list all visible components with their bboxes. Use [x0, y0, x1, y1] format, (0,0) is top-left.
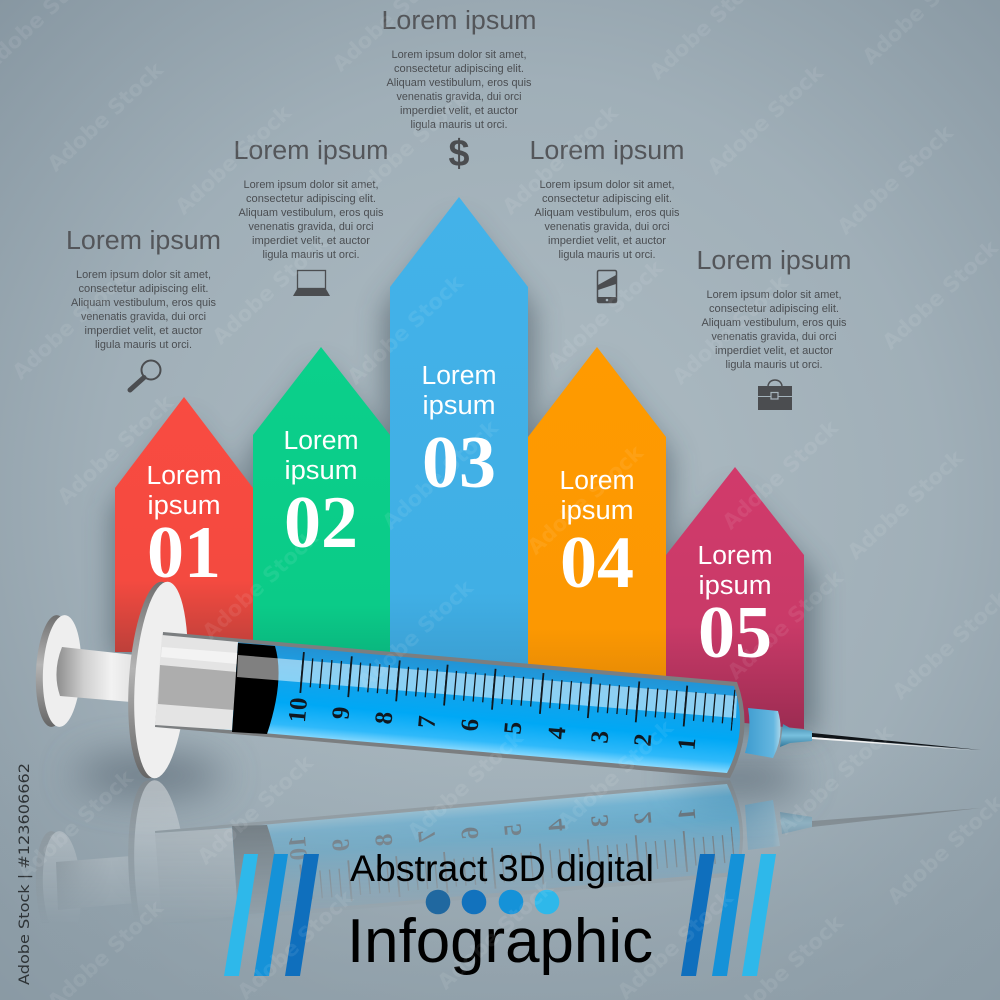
scale numbers: 4 — [544, 725, 572, 740]
scale numbers: 6 — [457, 718, 484, 732]
watermarks: Adobe Stock — [343, 270, 468, 389]
stripes right — [681, 854, 776, 976]
scale numbers: 5 — [500, 721, 527, 735]
scale numbers: 3 — [587, 730, 614, 744]
text block 05: Lorem ipsum — [696, 247, 852, 275]
panel: arrow 04: Lorem — [560, 467, 634, 495]
panel: arrow 03: 03 — [422, 422, 496, 504]
syringe reflection: 7 — [414, 829, 441, 843]
watermarks: Adobe Stock — [348, 85, 473, 204]
panel: arrow 02: Lorem — [284, 427, 358, 455]
syringe reflection: 5 — [500, 823, 527, 837]
syringe reflection: 8 — [371, 833, 398, 847]
scale numbers: 2 — [630, 733, 657, 747]
text block 05: Aliquam vestibulum, eros quis — [702, 317, 847, 329]
syringe reflection: 6 — [457, 826, 484, 840]
watermarks: Adobe Stock — [53, 390, 178, 509]
watermarks: Adobe Stock — [718, 415, 843, 534]
scale numbers: 10 — [284, 696, 313, 724]
panel: arrow 02 — [253, 347, 390, 670]
watermarks: Adobe Stock — [553, 715, 678, 834]
nozzle — [745, 708, 812, 758]
scale numbers: 8 — [371, 711, 398, 725]
floor plane — [0, 740, 1000, 1000]
text block 01: Lorem ipsum — [66, 227, 221, 255]
barrel flange — [122, 580, 194, 780]
watermarks: Adobe Stock — [703, 60, 828, 179]
scale numbers: 9 — [328, 706, 355, 720]
watermarks: Adobe Stock — [433, 875, 558, 994]
watermarks: Adobe Stock — [843, 445, 968, 564]
text block 03: Lorem ipsum — [382, 7, 536, 35]
panel: arrow 05: 05 — [698, 592, 772, 674]
icon: magnifier — [130, 360, 160, 390]
text block 02: Aliquam vestibulum, eros quis — [238, 207, 384, 219]
plunger seal — [232, 643, 279, 734]
text block 02: imperdiet velit, et auctor — [252, 235, 370, 247]
syringe — [33, 580, 981, 780]
plunger body — [155, 635, 238, 730]
panel: arrow 01: 01 — [147, 512, 221, 594]
text block 04: consectetur adipiscing elit. — [542, 193, 672, 205]
title line 2: Infographic — [347, 907, 653, 976]
watermarks: Adobe Stock — [668, 270, 793, 389]
panel: arrow 01: ipsum — [148, 492, 220, 520]
text block 02: consectetur adipiscing elit. — [246, 193, 376, 205]
stock side label: Adobe Stock | #123606662 — [17, 763, 33, 985]
panel: arrow 04 — [528, 347, 666, 690]
watermarks: Adobe Stock — [543, 255, 668, 374]
panel: arrow 01: Lorem — [146, 462, 222, 490]
text block 02: Lorem ipsum — [234, 137, 388, 165]
syringe reflection: 1 — [674, 807, 701, 821]
syringe reflection: 2 — [630, 811, 657, 825]
plunger end flange — [33, 614, 84, 728]
text block 05 — [696, 247, 852, 371]
glass highlight — [237, 655, 737, 718]
text block 04: imperdiet velit, et auctor — [548, 235, 666, 247]
text block 04 — [530, 137, 684, 261]
text block 02: venenatis gravida, dui orci — [248, 221, 374, 233]
text block 04: ligula mauris ut orci. — [558, 249, 656, 261]
floor shadows under syringe — [75, 755, 802, 798]
text block 05: Lorem ipsum dolor sit amet, — [706, 289, 842, 301]
panel: arrow 04: ipsum — [560, 497, 634, 525]
liquid — [159, 636, 740, 773]
text block 04: Lorem ipsum — [530, 137, 684, 165]
text block 02: ligula mauris ut orci. — [262, 249, 360, 261]
watermarks: Adobe Stock — [193, 750, 318, 869]
stripes left — [224, 854, 319, 976]
text block 04: Lorem ipsum dolor sit amet, — [540, 179, 674, 191]
watermarks: Adobe Stock — [878, 235, 1000, 354]
panel: arrow 05 — [666, 467, 804, 729]
text block 05: imperdiet velit, et auctor — [715, 345, 833, 357]
text block 03: consectetur adipiscing elit. — [394, 63, 524, 75]
watermarks: Adobe Stock — [523, 440, 648, 559]
scale numbers — [284, 696, 701, 751]
panel: arrow 01 — [115, 397, 253, 652]
text block 03: ligula mauris ut orci. — [410, 119, 508, 131]
panel: arrow 05: ipsum — [698, 572, 772, 600]
syringe reflection: 10 — [284, 834, 313, 862]
watermarks: Adobe Stock — [773, 720, 898, 839]
text block 03: Aliquam vestibulum, eros quis — [386, 77, 532, 89]
text block 01: ligula mauris ut orci. — [95, 339, 192, 351]
watermarks: Adobe Stock — [43, 57, 168, 176]
text block 03: Lorem ipsum dolor sit amet, — [392, 49, 526, 61]
text block 01 — [66, 227, 221, 351]
watermarks: Adobe Stock — [378, 415, 503, 534]
watermarks: Adobe Stock — [8, 265, 133, 384]
syringe reflection: 9 — [328, 838, 355, 852]
panel: arrow 04: 04 — [560, 522, 634, 604]
barrel wall — [155, 632, 745, 778]
panel: arrow 05: Lorem — [698, 542, 772, 570]
title line 1: Abstract 3D digital — [350, 847, 654, 889]
watermarks: Adobe Stock — [403, 725, 528, 844]
icon: briefcase — [758, 380, 792, 410]
watermarks: Adobe Stock — [353, 575, 478, 694]
icon: dollar sign: $ — [448, 133, 470, 175]
text block 05: ligula mauris ut orci. — [726, 359, 822, 371]
text block 04: Aliquam vestibulum, eros quis — [534, 207, 680, 219]
syringe reflection: 3 — [587, 814, 614, 828]
syringe reflection — [38, 780, 978, 906]
text block 03: venenatis gravida, dui orci — [396, 91, 522, 103]
watermarks: Adobe Stock — [13, 765, 138, 884]
text block 03: imperdiet velit, et auctor — [400, 105, 518, 117]
text block 01: imperdiet velit, et auctor — [84, 325, 203, 337]
watermarks: Adobe Stock — [198, 525, 323, 644]
watermarks: Adobe Stock — [171, 100, 296, 219]
panel: arrow 02: 02 — [284, 482, 358, 564]
panel: arrow 02: ipsum — [284, 457, 358, 485]
watermarks: Adobe Stock — [833, 120, 958, 239]
text block 01: consectetur adipiscing elit. — [78, 283, 208, 295]
scale numbers: 7 — [414, 715, 441, 729]
text block 02: Lorem ipsum dolor sit amet, — [244, 179, 378, 191]
syringe reflection: 4 — [544, 818, 572, 833]
text block 02 — [234, 137, 388, 261]
panel: arrow 03: ipsum — [422, 392, 496, 420]
scale numbers: 1 — [674, 737, 701, 751]
dots — [426, 890, 559, 914]
text block 01: Aliquam vestibulum, eros quis — [71, 297, 217, 309]
watermarks: Adobe Stock — [723, 565, 848, 684]
watermarks: Adobe Stock — [208, 230, 333, 349]
arrow shadows — [112, 220, 815, 735]
title block — [224, 847, 776, 976]
text block 04: venenatis gravida, dui orci — [544, 221, 670, 233]
watermarks: Adobe Stock — [498, 100, 623, 219]
icon: smartphone — [598, 270, 616, 303]
panel: arrow 03 — [390, 197, 528, 680]
text block 05: consectetur adipiscing elit. — [709, 303, 839, 315]
text block 05: venenatis gravida, dui orci — [712, 331, 836, 343]
icon: laptop — [293, 270, 330, 296]
graduation ticks — [301, 672, 734, 710]
needle — [812, 733, 981, 750]
panel: arrow 03: Lorem — [422, 362, 496, 390]
plunger rod — [56, 647, 135, 702]
text block 01: venenatis gravida, dui orci — [81, 311, 206, 323]
text block 03 — [382, 7, 536, 131]
text block 01: Lorem ipsum dolor sit amet, — [76, 269, 211, 281]
